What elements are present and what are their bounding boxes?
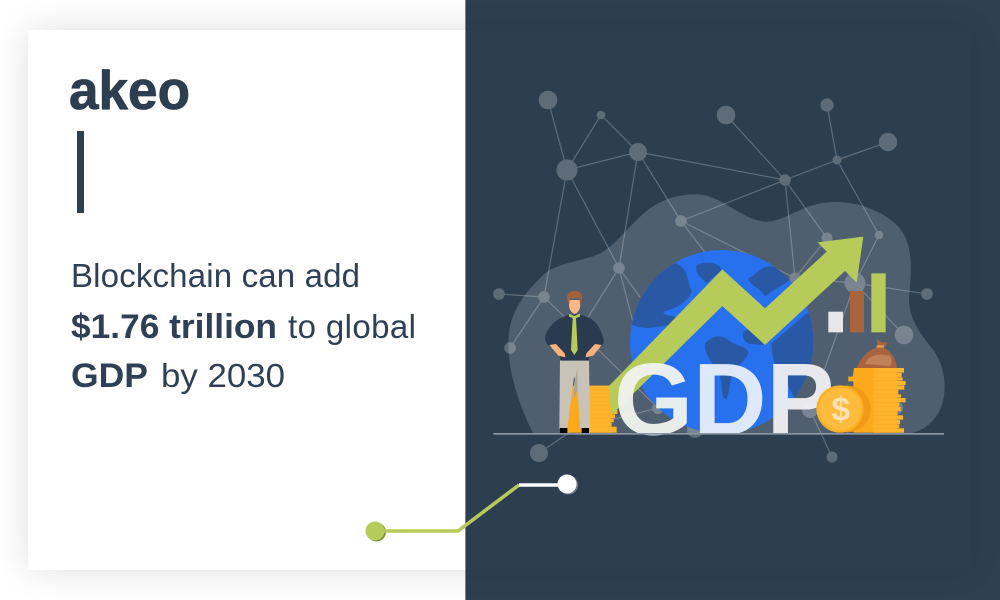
icon: coin stack behind person xyxy=(567,386,618,433)
icon: globe xyxy=(628,250,818,433)
network of connected nodes xyxy=(493,91,933,462)
icon: large coin stack xyxy=(848,368,906,433)
headline text: to global xyxy=(288,308,416,345)
panel: dark right side xyxy=(465,0,1000,600)
title: GDP large letters: GDP xyxy=(614,342,834,456)
headline text: by 2030 xyxy=(161,357,285,394)
vertical accent bar xyxy=(77,131,84,213)
icon: small bar chart xyxy=(828,273,886,332)
infographic artwork xyxy=(70,69,944,542)
icon: dollar coin: $ xyxy=(831,392,850,429)
illustration: GDP growth scene xyxy=(493,237,944,456)
connector line with nodes xyxy=(366,474,578,542)
logo: akeo: akeo xyxy=(69,59,190,121)
icon: dollar coin xyxy=(816,385,871,433)
background blob xyxy=(508,194,945,434)
headline text: $1.76 trillion xyxy=(71,308,277,346)
headline text: Blockchain can add xyxy=(71,257,360,294)
ground line xyxy=(493,433,944,435)
headline text: GDP xyxy=(71,357,148,395)
icon: rising green arrow xyxy=(608,237,863,415)
icon: money bag xyxy=(857,339,897,368)
icon: person standing xyxy=(545,291,604,433)
headline text xyxy=(71,257,416,395)
